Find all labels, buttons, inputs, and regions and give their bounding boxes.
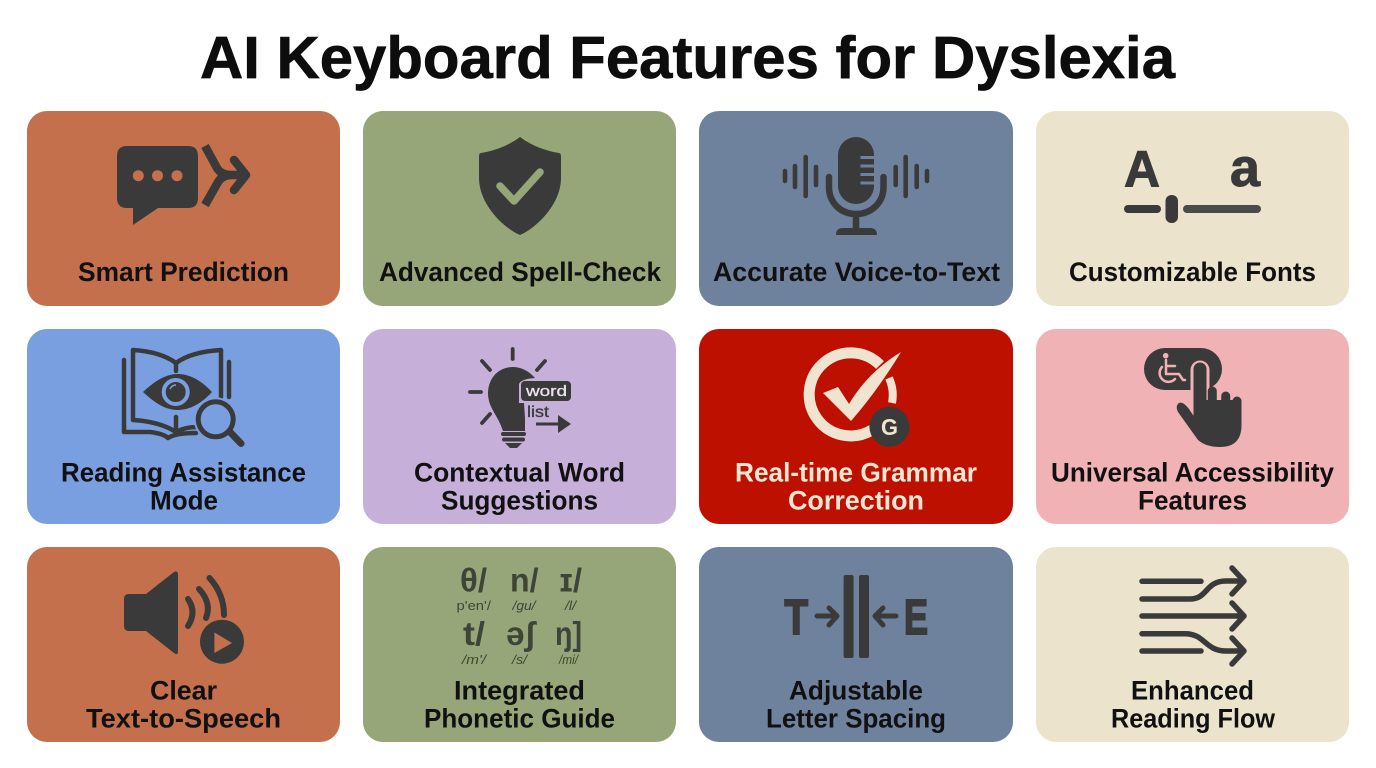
panel: Universal Accessibility Features	[1036, 329, 1349, 524]
label	[86, 676, 281, 734]
icon: phonetic symbols	[456, 562, 582, 667]
panel: Real-time Grammar Correction	[699, 329, 1013, 524]
icon: grammar check with G badge: G	[881, 414, 898, 440]
panel: Contextual Word Suggestions	[363, 329, 676, 524]
icon: phonetic symbols: əʃ	[506, 615, 538, 652]
label: Phonetic Guide	[424, 704, 615, 734]
icon: letter spacing arrows: E	[904, 591, 928, 645]
icon: phonetic symbols: /gu/	[511, 599, 537, 613]
panel: Customizable Fonts	[1036, 111, 1349, 306]
panel: Adjustable Letter Spacing	[699, 547, 1013, 742]
label: Integrated	[454, 676, 585, 706]
label: Smart Prediction	[78, 257, 289, 287]
label: Contextual Word	[414, 458, 625, 488]
icon: phonetic symbols: /s/	[511, 653, 529, 667]
label: Mode	[150, 486, 218, 516]
panel: Clear Text-to-Speech	[27, 547, 340, 742]
label: Correction	[788, 486, 924, 516]
icon: light bulb with word list: word	[525, 383, 567, 400]
icon: font size slider	[1124, 138, 1261, 223]
label	[1111, 676, 1276, 734]
icon: phonetic symbols: ɪ/	[560, 562, 582, 598]
icon: phonetic symbols: /mi/	[558, 653, 579, 667]
label: Suggestions	[441, 486, 598, 516]
label	[766, 676, 946, 734]
icon: phonetic symbols: p'en'/	[456, 599, 492, 613]
panel: Integrated Phonetic Guide	[363, 547, 676, 742]
icon: letter spacing arrows	[784, 575, 928, 658]
icon: font size slider: A	[1124, 140, 1160, 198]
icon: phonetic symbols: /m'/	[461, 653, 488, 667]
label: Adjustable	[789, 676, 923, 706]
label: Text-to-Speech	[86, 704, 281, 734]
label	[61, 458, 306, 516]
label: Enhanced	[1131, 676, 1254, 706]
label	[735, 458, 977, 516]
label: Features	[1138, 486, 1247, 516]
icon: microphone with sound waves	[785, 137, 927, 235]
label: Reading Flow	[1111, 704, 1276, 734]
icon: phonetic symbols: t/	[463, 615, 485, 652]
icon: font size slider: a	[1230, 138, 1261, 198]
icon: speech bubble with merging arrows	[117, 146, 246, 225]
icon: book with eye and magnifier	[124, 350, 241, 444]
label: Accurate Voice-to-Text	[713, 257, 1000, 287]
icon: phonetic symbols: ŋ]	[555, 615, 582, 652]
label	[1051, 458, 1334, 516]
icon: phonetic symbols: θ/	[460, 562, 487, 598]
panel: Reading Assistance Mode	[27, 329, 340, 524]
icon: letter spacing arrows: T	[784, 591, 808, 645]
icon: flowing reading lines	[1142, 568, 1244, 664]
icon: shield with check	[479, 137, 561, 235]
icon: grammar check with G badge	[809, 352, 909, 447]
label: Universal Accessibility	[1051, 458, 1334, 488]
label: Customizable Fonts	[1069, 257, 1316, 287]
label	[414, 458, 625, 516]
panel: Advanced Spell-Check	[363, 111, 676, 306]
label: Letter Spacing	[766, 704, 946, 734]
icon: speaker with play button	[124, 571, 244, 664]
label: Clear	[150, 676, 217, 706]
icon: phonetic symbols: /l/	[564, 599, 578, 613]
label: Reading Assistance	[61, 458, 306, 488]
icon: light bulb with word list	[470, 349, 571, 448]
panel: Enhanced Reading Flow	[1036, 547, 1349, 742]
title: AI Keyboard Features for Dyslexia	[200, 25, 1176, 91]
icon: light bulb with word list: list	[527, 404, 550, 421]
label: Real-time Grammar	[735, 458, 977, 488]
panel: Accurate Voice-to-Text	[699, 111, 1013, 306]
icon: hand pressing accessibility button	[1144, 348, 1242, 447]
label	[424, 676, 615, 734]
label: Advanced Spell-Check	[379, 257, 662, 287]
panel: Smart Prediction	[27, 111, 340, 306]
icon: phonetic symbols: n/	[510, 562, 538, 598]
